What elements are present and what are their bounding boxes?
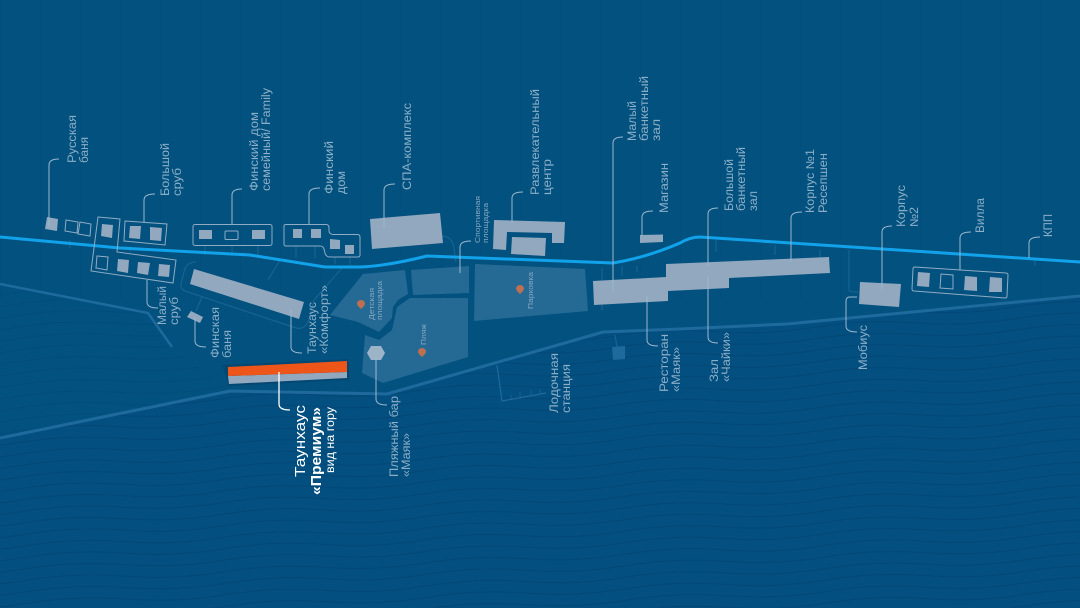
icon: beach bar hexagon: [367, 346, 385, 360]
label: block 2: Корпус: [896, 185, 908, 227]
background stripes: [0, 0, 1080, 300]
plot: playground: [330, 270, 408, 332]
label: beach bar Mayak: «Маяк»: [401, 433, 413, 477]
label: big log house: Большой: [160, 143, 172, 196]
label: restaurant Mayak: «Маяк»: [671, 347, 683, 392]
label: parking: Парковка: [526, 271, 535, 309]
label: block 1 reception: [805, 149, 830, 213]
label: small log house: Малый: [157, 286, 169, 325]
label: entertainment centre: центр: [542, 159, 554, 195]
building: block 2: [859, 282, 901, 307]
label: big log house: [160, 143, 184, 196]
label: townhouse Premium: Таунхаус: [292, 404, 309, 477]
building: Finnish bath: [187, 311, 203, 323]
label: Russian bath: Русская: [67, 115, 79, 163]
label: Finnish bath: [210, 307, 234, 358]
label: small banquet hall: [627, 76, 663, 141]
label: shop: Магазин: [659, 163, 671, 213]
label: beach bar Mayak: [389, 396, 413, 477]
label: townhouse Comfort: [307, 285, 331, 354]
label: SPA complex: СПА-комплекс: [402, 103, 414, 190]
building: townhouse Premium: [222, 359, 349, 386]
coastline: [0, 284, 1080, 438]
leader lines: [49, 137, 1040, 410]
label: checkpoint: КПП: [1043, 214, 1055, 237]
label: Chaika hall: [709, 332, 733, 382]
label: playground: [367, 280, 384, 320]
building: Finnish house group: [284, 224, 360, 257]
label: block 1 reception: Ресепшен: [818, 153, 830, 213]
building: Finnish family house group: [193, 224, 272, 246]
pin: parking: [516, 285, 524, 294]
sea: [0, 284, 1080, 608]
plot: sports ground: [411, 266, 469, 295]
label: playground: площадка: [375, 280, 384, 320]
building: villa group: [912, 267, 1008, 298]
pin: playground: [357, 300, 365, 309]
icon: boat station pier: [497, 365, 546, 401]
label: townhouse Premium: «Премиум»: [308, 407, 325, 495]
label: Russian bath: [67, 115, 91, 163]
label: big banquet hall: Большой: [724, 159, 736, 211]
icon: buoy square: [612, 346, 625, 360]
label: townhouse Premium: вид на гору: [325, 407, 337, 473]
main road: [0, 237, 1080, 267]
label: Mobius: Мобиус: [858, 325, 870, 370]
label: entertainment centre: [530, 89, 554, 195]
building: entertainment centre: [493, 220, 565, 256]
label: townhouse Premium: [292, 404, 337, 495]
label: big banquet hall: [724, 147, 760, 211]
service roads: [70, 236, 1035, 347]
label: townhouse Comfort: «Комфорт»: [319, 285, 331, 354]
building: SPA complex: [370, 213, 443, 249]
label: boat station: Лодочная: [549, 353, 561, 413]
label: sports ground: площадка: [481, 202, 490, 243]
label: Finnish bath: баня: [222, 330, 234, 358]
label: playground: Детская: [367, 288, 376, 320]
label: Chaika hall: Зал: [709, 359, 721, 382]
label: Finnish house: Финский: [324, 141, 336, 194]
label: small banquet hall: зал: [651, 119, 663, 141]
building: restaurant, halls, block 1: [593, 257, 830, 305]
label: townhouse Comfort: Таунхаус: [307, 302, 319, 354]
pin: beach: [418, 348, 426, 357]
label: beach bar Mayak: Пляжный бар: [389, 396, 401, 477]
label: big banquet hall: банкетный: [736, 147, 748, 211]
label: small log house: [157, 286, 181, 325]
label: boat station: [549, 353, 573, 413]
label: Finnish family house: [249, 88, 273, 191]
plot: beach: [362, 298, 468, 383]
label: Finnish family house: Финский дом: [249, 112, 261, 191]
label: Finnish family house: семейный/ Family: [261, 88, 273, 191]
building: Russian bath: [45, 217, 91, 236]
plot: parking: [474, 264, 588, 321]
label: block 1 reception: Корпус №1: [805, 149, 817, 213]
label: restaurant Mayak: Ресторан: [659, 334, 671, 392]
label: beach: Пляж: [419, 324, 428, 345]
label: Finnish house: [324, 141, 348, 194]
label: sports ground: [473, 196, 490, 243]
label: Finnish bath: Финская: [210, 307, 222, 358]
building: townhouse Comfort: [190, 269, 304, 319]
building: small log house group: [91, 217, 176, 283]
label: sports ground: Спортивная: [473, 196, 482, 243]
label: small log house: сруб: [169, 297, 181, 325]
label: restaurant Mayak: [659, 334, 683, 392]
label: block 2: [896, 185, 921, 227]
label: villa: Вилла: [975, 197, 987, 233]
label: big banquet hall: зал: [748, 191, 760, 211]
label: big log house: сруб: [172, 168, 184, 196]
label: Chaika hall: «Чайки»: [721, 332, 733, 382]
label: Finnish house: дом: [336, 171, 348, 194]
building: big log house group: [124, 221, 167, 245]
label: small banquet hall: Малый: [627, 101, 639, 141]
label: boat station: станция: [561, 364, 573, 413]
label: entertainment centre: Развлекательный: [530, 89, 542, 195]
label: small banquet hall: банкетный: [639, 76, 651, 141]
building: shop: [640, 234, 663, 243]
label: Russian bath: баня: [79, 137, 91, 163]
label: block 2: №2: [909, 207, 921, 227]
